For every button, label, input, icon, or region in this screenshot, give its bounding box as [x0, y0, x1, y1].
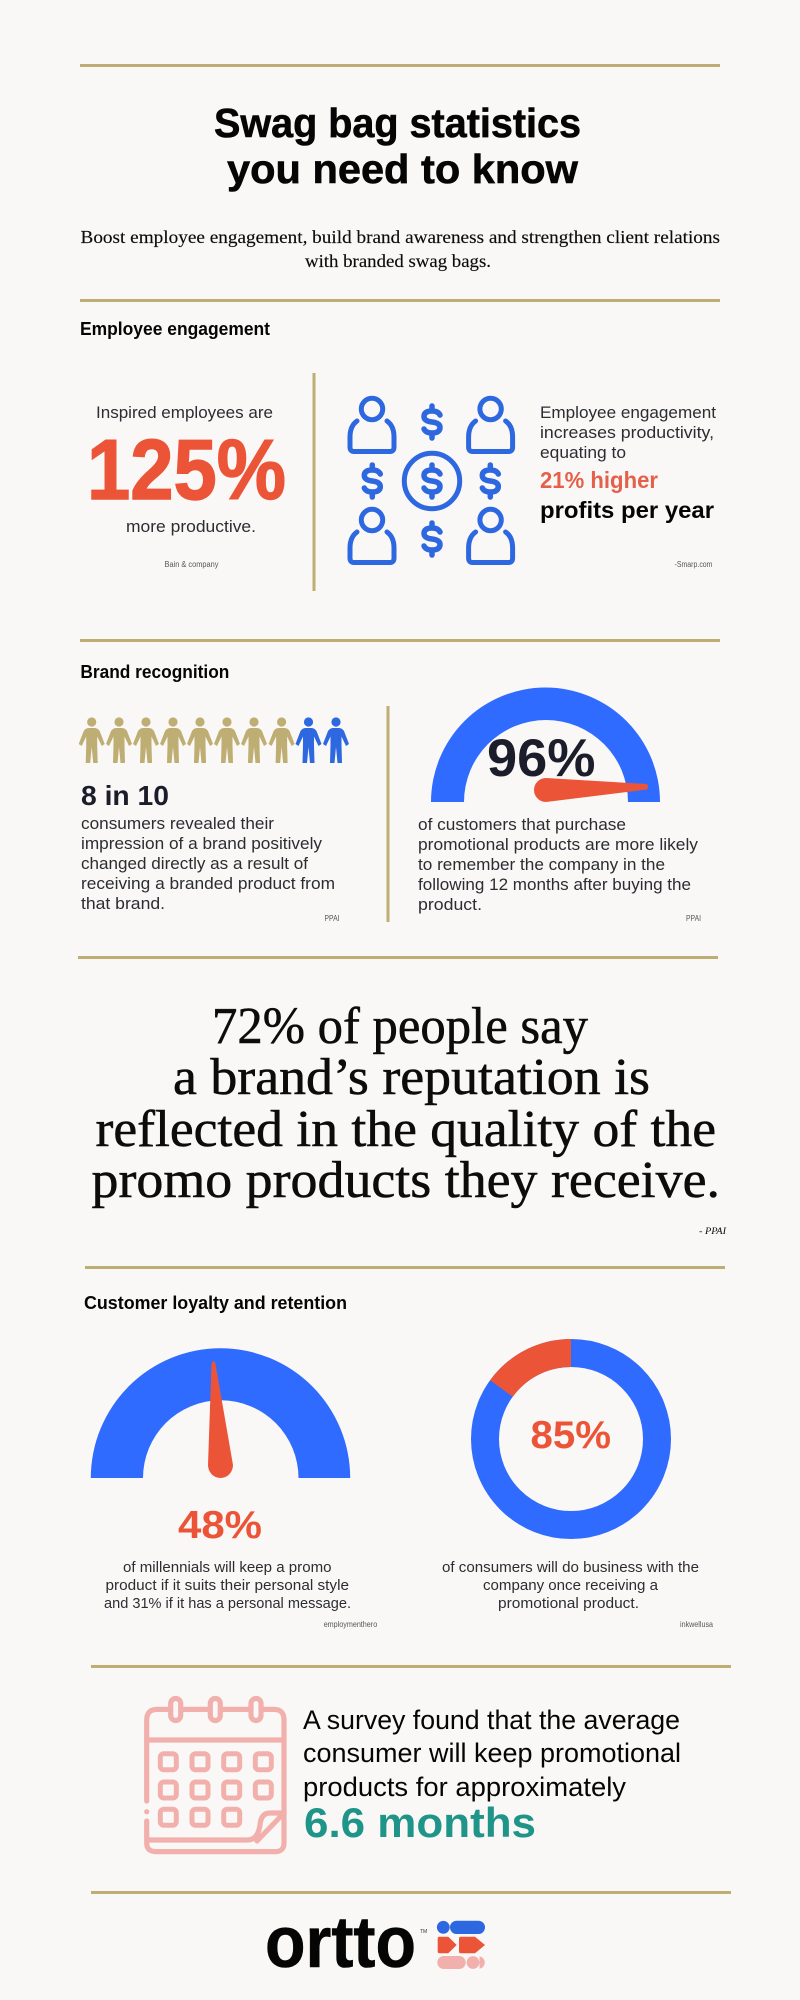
- panel: 85 percent stat: [442, 1339, 713, 1629]
- stat number: 125%: [87, 423, 286, 518]
- divider: footer: [91, 1891, 731, 1894]
- quote: 72% of people say: [212, 998, 588, 1055]
- stat description: [81, 814, 335, 913]
- panel: 96 percent stat: [418, 688, 701, 923]
- stat description: [442, 1559, 699, 1612]
- stat number: 85%: [530, 1414, 611, 1457]
- wordmark: ortto: [265, 1903, 416, 1983]
- quote: reflected in the quality of the: [96, 1101, 716, 1158]
- title: you need to know: [227, 146, 578, 192]
- stat number: 48%: [178, 1504, 262, 1547]
- panel: 125 percent stat: [87, 403, 286, 569]
- survey highlight: 6.6 months: [304, 1799, 536, 1846]
- stat description: that brand.: [81, 894, 165, 913]
- stat description: product.: [418, 895, 482, 914]
- intro text: [80, 227, 720, 271]
- stat description: of customers that purchase: [418, 815, 626, 834]
- intro text: Boost employee engagement, build brand awareness and strengthen client relations: [80, 227, 720, 247]
- stat description: to remember the company in the: [418, 855, 665, 874]
- source: PPAI: [324, 914, 340, 923]
- survey description: A survey found that the average: [303, 1705, 680, 1735]
- icon: employees and dollars: [350, 398, 513, 562]
- source: employmenthero: [324, 1620, 378, 1629]
- stat description: of millennials will keep a promo: [123, 1559, 332, 1576]
- source: inkwellusa: [680, 1620, 713, 1629]
- quote: a brand’s reputation is: [173, 1049, 650, 1106]
- panel: survey text: [303, 1705, 681, 1846]
- profit description: increases productivity,: [540, 423, 714, 442]
- profit highlight: 21% higher: [540, 467, 658, 493]
- stat description: consumers revealed their: [81, 814, 274, 833]
- divider: survey: [91, 1665, 731, 1668]
- stat intro text: Inspired employees are: [96, 403, 273, 422]
- stat description: of consumers will do business with the: [442, 1559, 699, 1576]
- divider: engagement vertical: [312, 373, 316, 591]
- profit description: equating to: [540, 443, 626, 462]
- quote source: - PPAI: [699, 1226, 727, 1236]
- divider: brand vertical: [386, 706, 390, 922]
- pictogram: people: [79, 717, 349, 763]
- profit text: profits per year: [540, 497, 714, 523]
- quote: [92, 998, 727, 1236]
- stat description: promotional product.: [498, 1595, 639, 1612]
- stat description: impression of a brand positively: [81, 834, 322, 853]
- donut chart: 85 percent: [485, 1339, 657, 1525]
- panel: profit stat: [540, 403, 716, 569]
- title: Swag bag statistics: [214, 100, 581, 146]
- source: PPAI: [686, 914, 701, 923]
- stat description: following 12 months after buying the: [418, 875, 691, 894]
- panel: 48 percent stat: [91, 1348, 378, 1629]
- logo mark: [437, 1921, 485, 1969]
- divider: engagement: [80, 299, 720, 302]
- trademark: TM: [420, 1929, 427, 1935]
- source: Bain & company: [164, 560, 218, 569]
- intro text: with branded swag bags.: [305, 251, 491, 271]
- heading: brand recognition: Brand recognition: [80, 662, 229, 682]
- stat description: and 31% if it has a personal message.: [104, 1595, 351, 1612]
- divider: top: [80, 64, 720, 67]
- panel: 8 in 10 stat: [79, 717, 349, 923]
- divider: quote: [78, 956, 718, 959]
- stat description: promotional products are more likely: [418, 835, 699, 854]
- source: -Smarp.com: [674, 560, 713, 569]
- stat outro text: more productive.: [126, 517, 256, 536]
- icon: calendar: [147, 1698, 284, 1852]
- stat description: company once receiving a: [483, 1577, 659, 1594]
- title: [214, 100, 581, 192]
- survey description: products for approximately: [303, 1772, 626, 1802]
- profit description: [540, 403, 716, 462]
- stat number: 96%: [487, 729, 596, 788]
- stat description: changed directly as a result of: [81, 854, 308, 873]
- divider: loyalty: [85, 1266, 725, 1269]
- gauge: 48 percent: [91, 1348, 350, 1478]
- stat description: [104, 1559, 351, 1612]
- survey description: [303, 1705, 681, 1802]
- heading: customer loyalty and retention: Customer loyalty and retention: [84, 1293, 347, 1313]
- survey description: consumer will keep promotional: [303, 1738, 681, 1768]
- stat description: product if it suits their personal style: [106, 1577, 349, 1594]
- gauge: 96 percent: [431, 688, 660, 802]
- quote: promo products they receive.: [92, 1152, 720, 1209]
- profit description: Employee engagement: [540, 403, 716, 422]
- logo: ortto: [265, 1903, 485, 1983]
- divider: brand: [80, 639, 720, 642]
- stat description: [418, 815, 699, 914]
- stat description: receiving a branded product from: [81, 874, 335, 893]
- heading: employee engagement: Employee engagement: [80, 319, 270, 339]
- stat number: 8 in 10: [81, 780, 169, 811]
